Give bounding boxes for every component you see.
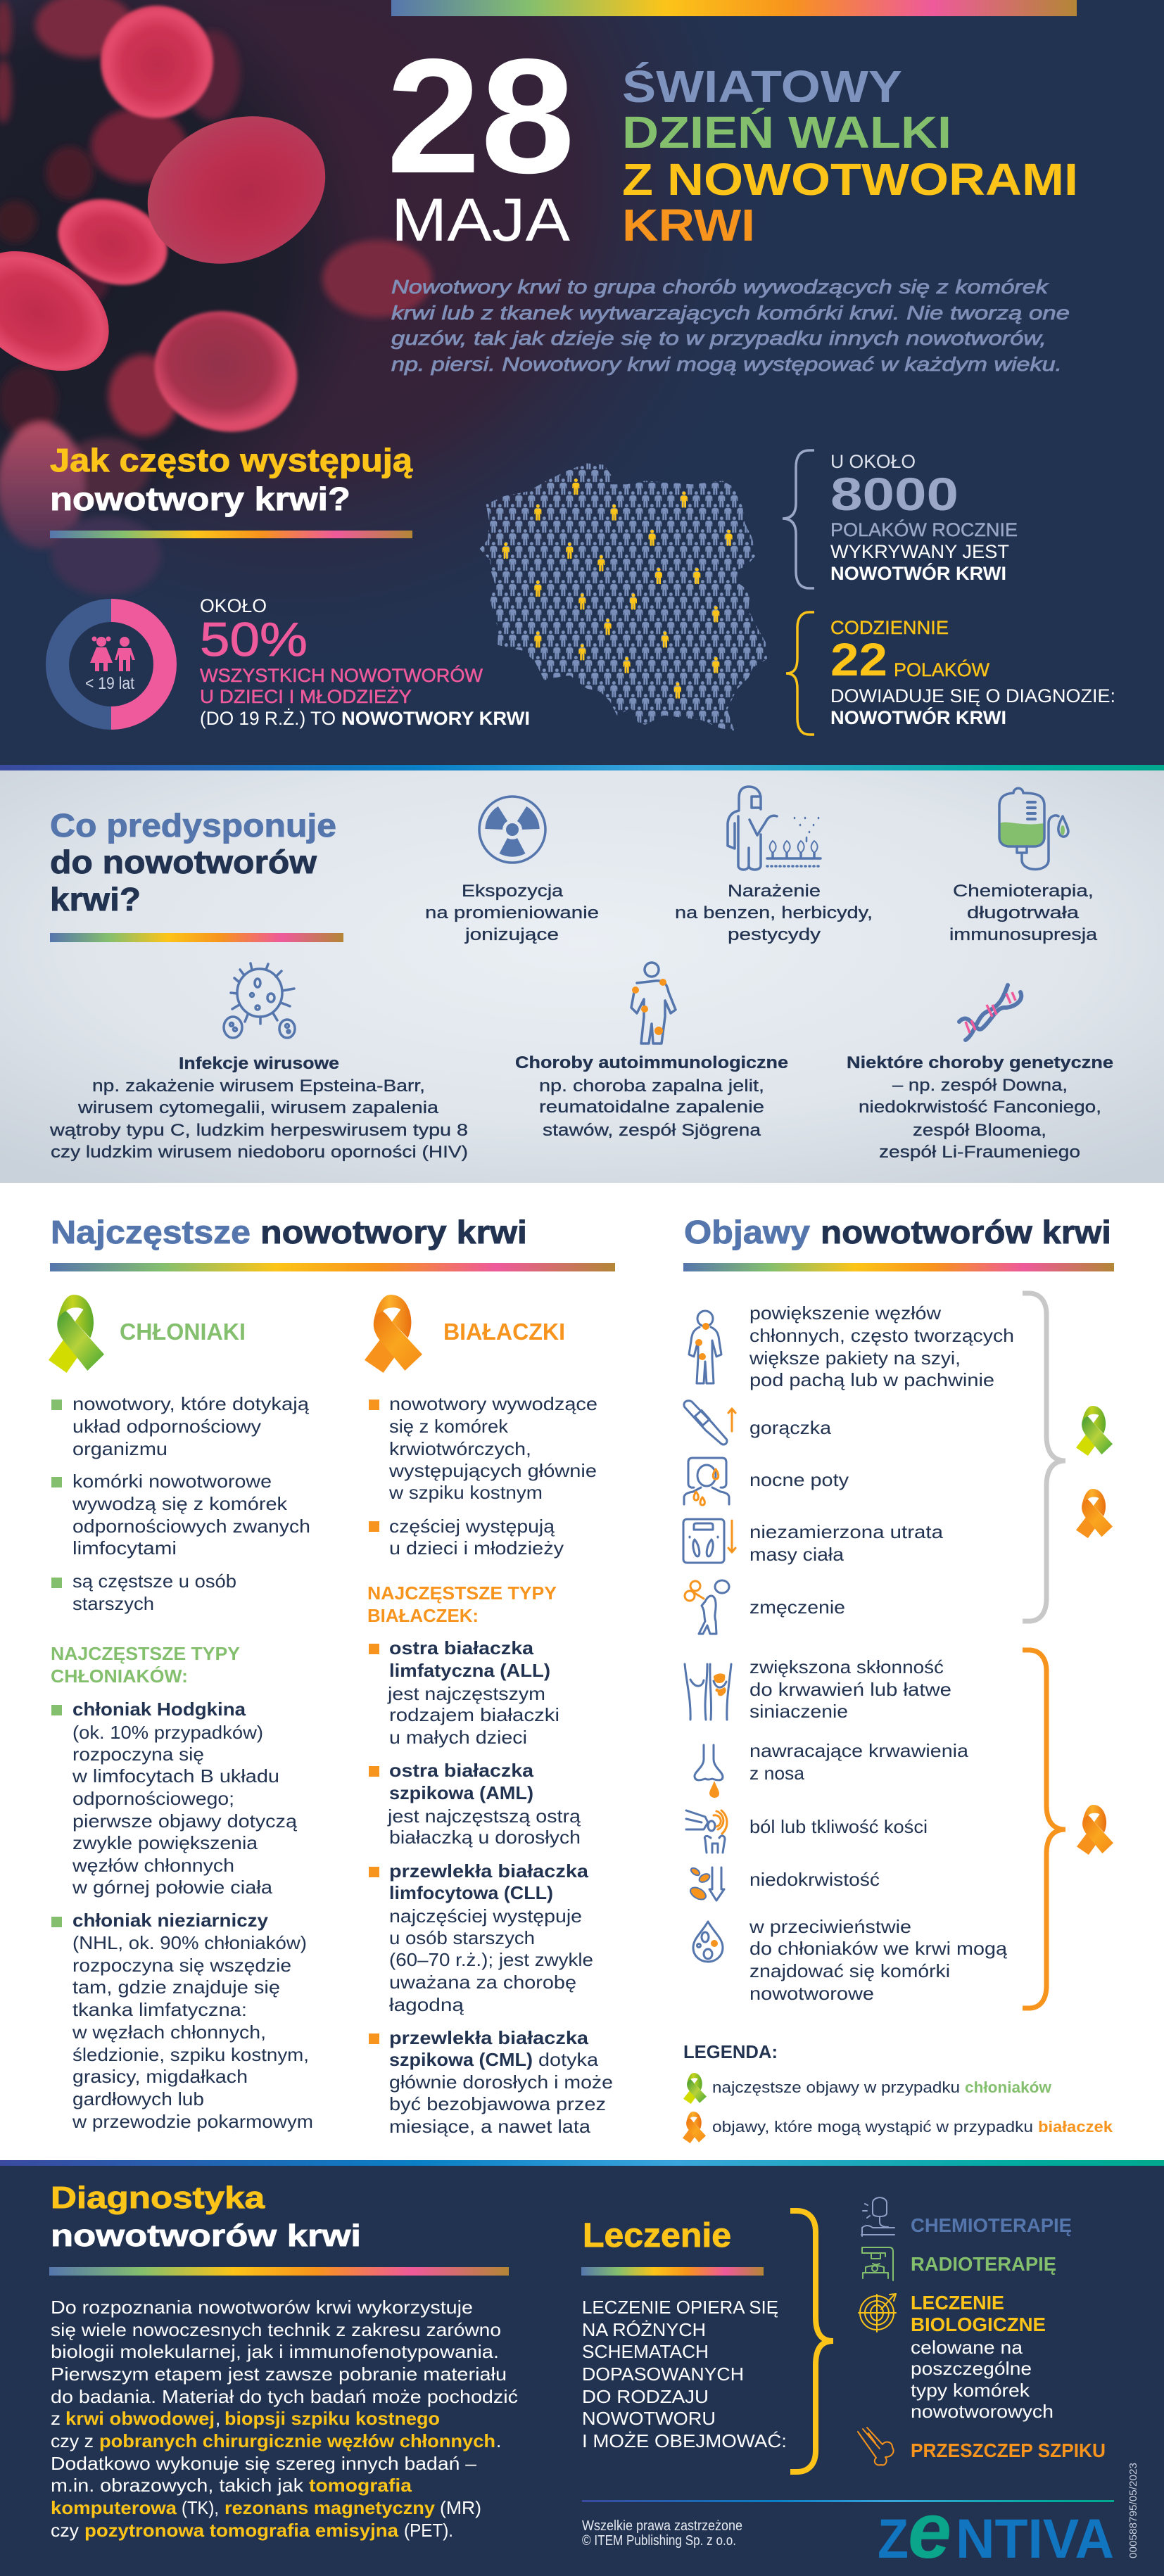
column: białaczki text: najczęściej występuje (389, 1905, 582, 1927)
symptom list text: znajdować się komórki (749, 1960, 950, 1981)
caption: choroby genetyczne: – np. zespół Downa, (892, 1076, 1068, 1095)
treatment options: celowane na (911, 2337, 1023, 2358)
diagnosis paragraph: rezonans magnetyczny (224, 2497, 436, 2518)
icon: scale (683, 1519, 735, 1563)
column: chłoniaki text: odpornościowych zwanych (72, 1516, 310, 1537)
caption: ekspozycja (425, 882, 599, 944)
column: białaczki text: przewlekła białaczka (389, 2027, 589, 2048)
symptom list text: siniaczenie (749, 1701, 848, 1722)
column: białaczki text: być bezobjawowa przez (389, 2093, 606, 2114)
diagnosis paragraph: czy (51, 2520, 79, 2541)
diagnosis paragraph: , (215, 2408, 220, 2429)
legend: LEGENDA: (683, 2041, 778, 2062)
column: białaczki text: nowotwory wywodzące (389, 1393, 597, 1414)
panel: predispositions (0, 765, 1164, 1183)
symptom list text: pod pachą lub w pachwinie (749, 1369, 994, 1390)
stat: 8000: U OKOŁO (830, 451, 916, 472)
brace: yellow (790, 2211, 833, 2472)
title: DZIEŃ WALKI (622, 107, 951, 158)
diagnosis paragraph: tomografia (309, 2475, 412, 2496)
copyright: Wszelkie prawa zastrzeżone (582, 2518, 742, 2534)
treatment intro: NOWOTWORU (582, 2408, 716, 2429)
treatment intro: SCHEMATACH (582, 2341, 709, 2362)
column: białaczki text: występujących głównie (388, 1460, 597, 1481)
diagnosis paragraph: pozytronowa tomografia emisyjna (84, 2520, 399, 2541)
legend: objawy, które mogą wystąpić w przypadku (712, 2118, 1033, 2136)
diagnosis paragraph: czy z (51, 2430, 94, 2451)
symptom list text: nawracające krwawienia (749, 1740, 969, 1761)
symptom list text: w przeciwieństwie (749, 1916, 911, 1937)
column: białaczki text: uważana za chorobę (389, 1972, 576, 1993)
stat: 8000: WYKRYWANY JEST (830, 541, 1009, 562)
heading: leczenie: Leczenie (583, 2217, 731, 2254)
icon: knee pain (686, 1810, 727, 1853)
intro paragraph: krwi lub z tkanek wytwarzających komórki krwi. Nie tworzą one (391, 302, 1070, 324)
column: białaczki text: u osób starszych (389, 1927, 535, 1948)
icon: legs with bruise (685, 1664, 731, 1720)
icon: radiation (479, 797, 545, 863)
column: białaczki text: BIAŁACZEK: (367, 1605, 479, 1626)
treatment options: poszczególne (911, 2358, 1032, 2379)
symptom list text: zwiększona skłonność (749, 1656, 944, 1677)
caption: choroby genetyczne: Niektóre choroby genetyczne (847, 1053, 1113, 1072)
column: chłoniaki text: grasicy, migdałkach (72, 2066, 248, 2087)
treatment intro: NA RÓŻNYCH (582, 2319, 706, 2340)
stat: 50%: 50% (200, 613, 308, 666)
icon: target (859, 2294, 896, 2332)
column: białaczki text: ostra białaczka (389, 1760, 534, 1781)
symptom list text (749, 1302, 1014, 2004)
donut chart 50% (46, 599, 177, 730)
column: białaczki text: limfatyczna (ALL) (389, 1660, 550, 1681)
heading: leczenie (581, 2217, 764, 2276)
heading: objawy nowotworów krwi (683, 1214, 1114, 1271)
column: chłoniaki text: (ok. 10% przypadków) (72, 1722, 263, 1743)
column: chłoniaki text: CHŁONIAKÓW: (51, 1665, 188, 1687)
column: białaczki text: u małych dzieci (389, 1727, 527, 1748)
caption: choroby autoimmunologiczne: np. choroba zapalna jelit, (539, 1077, 764, 1096)
legend: najczęstsze objawy w przypadku (712, 2079, 960, 2096)
icon: radiotherapy (862, 2247, 893, 2280)
symptom list text: masy ciała (749, 1544, 844, 1565)
column: chłoniaki text: rozpoczyna się (72, 1744, 204, 1765)
column: chłoniaki text: zwykle powiększenia (72, 1832, 258, 1853)
caption: choroby genetyczne: zespół Blooma, (913, 1121, 1046, 1140)
icon: virus (224, 963, 295, 1038)
column: białaczki text: ostra białaczka (389, 1637, 534, 1658)
caption: narażenie (675, 882, 873, 944)
caption: choroby genetyczne (847, 1053, 1113, 1162)
column: chłoniaki text: w górnej połowie ciała (72, 1877, 273, 1898)
treatment options: CHEMIOTERAPIĘ (911, 2214, 1072, 2236)
diagnosis paragraph: Do rozpoznania nowotworów krwi wykorzystuje (51, 2297, 473, 2318)
brace: 8000 (783, 450, 814, 588)
column: chłoniaki text: (NHL, ok. 90% chłoniaków) (72, 1932, 307, 1953)
treatment intro: LECZENIE OPIERA SIĘ (582, 2297, 778, 2318)
panel: hero header (0, 0, 1164, 767)
caption: chemioterapia: Chemioterapia, (953, 882, 1094, 901)
symptom list text: do chłoniaków we krwi mogą (749, 1938, 1008, 1959)
diagnosis paragraph: komputerowa (51, 2497, 177, 2518)
treatment options: typy komórek (911, 2380, 1030, 2401)
bullets (51, 1400, 62, 1927)
column: chłoniaki text: wywodzą się z komórek (72, 1493, 288, 1514)
column: białaczki text: limfocytowa (CLL) (389, 1882, 553, 1903)
column: białaczki text: łagodną (389, 1994, 464, 2015)
diagnosis paragraph: . (496, 2430, 501, 2451)
symptom list text: zmęczenie (749, 1597, 845, 1618)
heading: co predysponuje: Co predysponuje (50, 807, 336, 844)
legend: chłoniaków (965, 2079, 1052, 2096)
symptom list text: z nosa (749, 1763, 805, 1784)
column: chłoniaki text: komórki nowotworowe (72, 1471, 272, 1492)
title: Z NOWOTWORAMI (622, 154, 1078, 205)
column: białaczki text: szpikowa (CML) (389, 2049, 533, 2070)
icon: body lymph nodes (689, 1311, 721, 1383)
logo: Zentiva (878, 2487, 1114, 2575)
column: białaczki text: dotyka (538, 2049, 599, 2070)
copyright: © ITEM Publishing Sp. z o.o. (582, 2533, 736, 2549)
icon: night sweats (684, 1458, 729, 1505)
diagnosis paragraph: (PET). (404, 2520, 453, 2541)
caption: chemioterapia: długotrwała (967, 903, 1080, 922)
column: chłoniaki text: węzłów chłonnych (72, 1855, 234, 1876)
caption: choroby autoimmunologiczne: stawów, zespół Sjögrena (543, 1121, 761, 1140)
stat: 8000: NOWOTWÓR KRWI (830, 562, 1006, 584)
treatment options: nowotworowych (911, 2401, 1054, 2422)
ribbon: białaczki (365, 1295, 422, 1373)
column: białaczki text: miesiące, a nawet lata (389, 2116, 591, 2137)
symptom list text: do krwawień lub łatwe (749, 1679, 951, 1700)
icon: tired person (685, 1580, 729, 1634)
column: białaczki text: białaczką u dorosłych (389, 1827, 581, 1848)
legend: białaczek (1038, 2118, 1113, 2136)
icon: anaemia (688, 1867, 724, 1902)
heading: co predysponuje: do nowotworów (50, 844, 317, 880)
treatment options: LECZENIE (911, 2292, 1004, 2314)
icon: joints (631, 963, 676, 1043)
column: chłoniaki text: są częstsze u osób (72, 1571, 236, 1592)
caption: chemioterapia: immunosupresja (949, 925, 1098, 944)
symptom list text: powiększenie węzłów (749, 1302, 941, 1324)
title date: 28 maja: MAJA (391, 186, 571, 254)
symptom list text: nocne poty (749, 1469, 849, 1490)
column: chłoniaki text: chłoniak Hodgkina (72, 1699, 246, 1720)
heading: co predysponuje: krwi? (50, 881, 141, 918)
caption: infekcje: Infekcje wirusowe (179, 1054, 339, 1073)
column: chłoniaki text: w przewodzie pokarmowym (72, 2111, 313, 2132)
column: chłoniaki text: tam, gdzie znajduje się (72, 1977, 280, 1998)
column: chłoniaki text: tkanka limfatyczna: (72, 1999, 247, 2020)
caption: choroby genetyczne: niedokrwistość Fanconiego, (859, 1098, 1101, 1117)
heading: co predysponuje (50, 807, 343, 942)
stat: 50%: OKOŁO (200, 595, 267, 616)
symptom list text: gorączka (749, 1417, 832, 1438)
diagnosis paragraph: (TK), (182, 2497, 219, 2518)
icon: worker spraying (728, 787, 821, 870)
diagnosis paragraph: się wiele nowoczesnych technik z zakresu zarówno (51, 2319, 501, 2340)
icon: children (90, 636, 135, 671)
stat: 8000: POLAKÓW ROCZNIE (830, 519, 1018, 540)
column: białaczki text: się z komórek (389, 1416, 509, 1437)
column: białaczki text: w szpiku kostnym (388, 1482, 543, 1503)
heading: najczęstsze nowotwory krwi: Najczęstsze (51, 1214, 251, 1250)
column: chłoniaki text: w limfocytach B układu (72, 1765, 279, 1787)
icon: thermometer (684, 1401, 735, 1445)
brace: 22 (786, 612, 814, 735)
stat: 22: POLAKÓW (894, 659, 990, 680)
stat: 50% (200, 595, 530, 729)
column: białaczki text: krwiotwórczych, (389, 1438, 531, 1459)
title: KRWI (622, 200, 755, 250)
icon: bone marrow (858, 2428, 894, 2465)
heading: diagnostyka (49, 2181, 509, 2276)
icon: nose bleed (695, 1745, 723, 1798)
caption: choroby autoimmunologiczne (515, 1053, 788, 1140)
column: chłoniaki text: w węzłach chłonnych, (72, 2022, 266, 2043)
bullets (369, 1400, 379, 2044)
heading: jak często: Jak często występują (50, 442, 412, 478)
caption: infekcje: wirusem cytomegalii, wirusem zapalenia (77, 1098, 439, 1117)
treatment intro: I MOŻE OBEJMOWAĆ: (582, 2430, 787, 2451)
column: białaczki text: (60–70 r.ż.); jest zwykle (389, 1949, 593, 1970)
logo: Zentiva: e (908, 2487, 951, 2575)
stat: 8000 (830, 451, 1018, 584)
column: chłoniaki text: rozpoczyna się wszędzie (72, 1955, 291, 1976)
column: chłoniaki text (51, 1393, 313, 2132)
caption: ekspozycja: Ekspozycja (462, 882, 564, 901)
treatment intro (582, 2297, 787, 2451)
logo: Zentiva: Z (878, 2507, 909, 2570)
ribbon: chłoniaki (49, 1295, 104, 1373)
caption: chemioterapia (949, 882, 1098, 944)
intro paragraph (391, 276, 1070, 375)
icon: chemotherapy (861, 2197, 894, 2236)
icon: IV drip (999, 788, 1068, 870)
diagnosis paragraph: biopsji szpiku kostnego (224, 2408, 440, 2429)
icon: DNA (959, 985, 1021, 1040)
ribbon: białaczki symptoms (1076, 1489, 1113, 1538)
document code: 000588795/05/2023 (1127, 2463, 1139, 2558)
stat: 8000: 8000 (830, 468, 959, 520)
intro paragraph: Nowotwory krwi to grupa chorób wywodzących się z komórek (391, 276, 1049, 298)
title (622, 61, 1078, 250)
title date: 28 maja: 28 (386, 25, 575, 208)
column: białaczki text (367, 1393, 613, 2137)
stat: 50%: U DZIECI I MŁODZIEŻY (200, 685, 412, 707)
ribbon: białaczki only (1077, 1805, 1113, 1855)
rainbow top bar (391, 0, 1077, 16)
stat: 50%: WSZYSTKICH NOWOTWORÓW (200, 664, 483, 686)
column: chłoniaki text: gardłowych lub (72, 2088, 204, 2109)
symptom list text: niezamierzona utrata (749, 1521, 944, 1542)
diagnosis paragraph: krwi obwodowej (65, 2408, 215, 2429)
intro paragraph: guzów, tak jak dzieje się to w przypadku innych nowotworów, (391, 327, 1046, 349)
caption: choroby autoimmunologiczne: reumatoidalne zapalenie (539, 1098, 764, 1117)
diagnosis paragraph: Dodatkowo wykonuje się szereg innych badań – (51, 2453, 477, 2474)
column: chłoniaki text: śledzionie, szpiku kostnym, (72, 2044, 309, 2065)
stat: 50%: NOWOTWORY KRWI (341, 708, 530, 729)
diagnosis paragraph: m.in. obrazowych, takich jak (51, 2475, 304, 2496)
donut chart 50%: < 19 lat (85, 674, 134, 693)
diagnosis paragraph: z (51, 2408, 61, 2429)
caption: narażenie: na benzen, herbicydy, (675, 903, 873, 922)
column: białaczki text: jest najczęstszym (387, 1683, 545, 1704)
stat: 22 (830, 617, 1115, 728)
caption: choroby genetyczne: zespół Li-Fraumeniego (879, 1143, 1080, 1162)
heading: diagnostyka: Diagnostyka (51, 2181, 265, 2215)
treatment intro: DOPASOWANYCH (582, 2364, 744, 2385)
column: chłoniaki text: NAJCZĘSTSZE TYPY (51, 1643, 240, 1664)
treatment options (911, 2214, 1106, 2461)
column: chłoniaki text: pierwsze objawy dotyczą (72, 1810, 298, 1832)
diagnosis paragraph: (MR) (440, 2497, 481, 2518)
heading: jak często: nowotwory krwi? (50, 481, 350, 517)
brace: grey (1023, 1293, 1065, 1621)
column: białaczki text: rodzajem białaczki (389, 1704, 559, 1725)
column: białaczki text: NAJCZĘSTSZE TYPY (367, 1582, 557, 1604)
diagnosis paragraph: Pierwszym etapem jest zawsze pobranie materiału (51, 2364, 507, 2385)
stat: 22: NOWOTWÓR KRWI (830, 706, 1006, 728)
column: białaczki text: szpikowa (AML) (389, 1782, 533, 1803)
treatment options: PRZESZCZEP SZPIKU (911, 2439, 1106, 2461)
caption: narażenie: Narażenie (728, 882, 821, 901)
symptom list text: chłonnych, często tworzących (749, 1325, 1014, 1346)
column: chłoniaki text: starszych (72, 1593, 154, 1614)
symptom list text: większe pakiety na szyi, (749, 1347, 961, 1369)
brace: orange (1023, 1650, 1065, 2008)
diagnosis paragraph: biologii molekularnej, jak i immunofenotypowania. (51, 2341, 499, 2362)
column: białaczki text: przewlekła białaczka (389, 1860, 589, 1882)
label: chłoniaki: CHŁONIAKI (120, 1319, 246, 1345)
column: chłoniaki text: odpornościowego; (72, 1788, 234, 1809)
heading: diagnostyka: nowotworów krwi (51, 2219, 361, 2253)
legend (683, 2041, 1113, 2143)
caption: ekspozycja: na promieniowanie (425, 903, 599, 922)
column: chłoniaki text: układ odpornościowy (72, 1416, 261, 1437)
diagnosis paragraph: pobranych chirurgicznie węzłów chłonnych (99, 2430, 495, 2451)
caption: infekcje: np. zakażenie wirusem Epsteina-Barr, (92, 1077, 425, 1096)
treatment intro: DO RODZAJU (582, 2386, 709, 2407)
caption: ekspozycja: jonizujące (464, 925, 559, 944)
symptom list text: ból lub tkliwość kości (749, 1816, 928, 1837)
column: chłoniaki text: limfocytami (72, 1537, 177, 1559)
symptom list text: nowotworowe (749, 1983, 874, 2004)
treatment options: BIOLOGICZNE (911, 2314, 1046, 2335)
ribbon: chłoniaki symptoms (1076, 1406, 1113, 1456)
heading: objawy nowotworów krwi: Objawy (684, 1214, 810, 1250)
column: białaczki text: głównie dorosłych i może (389, 2071, 613, 2093)
logo: Zentiva: NTIVA (956, 2507, 1114, 2570)
column: chłoniaki text: organizmu (72, 1438, 167, 1459)
panel: diagnosis and treatment (0, 2160, 1164, 2576)
icon: blood drop cells (693, 1922, 723, 1962)
column: białaczki text: jest najczęstszą ostrą (387, 1806, 581, 1827)
label: białaczki: BIAŁACZKI (443, 1319, 565, 1345)
illustration: red blood cells (0, 0, 432, 595)
caption: infekcje: wątroby typu C, ludzkim herpeswirusem typu 8 (49, 1121, 468, 1140)
caption: narażenie: pestycydy (728, 925, 821, 944)
symptom list text: niedokrwistość (749, 1869, 880, 1890)
map of Poland made of people (480, 463, 767, 730)
caption: infekcje: czy ludzkim wirusem niedoboru oporności (HIV) (51, 1143, 468, 1162)
stat: 22: DOWIADUJE SIĘ O DIAGNOZIE: (830, 685, 1115, 706)
heading: najczęstsze nowotwory krwi: nowotwory krwi (260, 1214, 527, 1250)
copyright (582, 2518, 742, 2549)
caption: infekcje (49, 1054, 468, 1162)
column: chłoniaki text: chłoniak nieziarniczy (72, 1910, 269, 1931)
column: chłoniaki text: nowotwory, które dotykają (72, 1393, 310, 1414)
stat: 22: 22 (830, 633, 887, 685)
stat: 22: CODZIENNIE (830, 617, 949, 638)
diagnosis paragraph: do badania. Materiał do tych badań może pochodzić (51, 2386, 518, 2407)
diagnosis paragraph (51, 2297, 518, 2541)
heading: najczęstsze nowotwory krwi (50, 1214, 615, 1271)
treatment options: RADIOTERAPIĘ (911, 2253, 1056, 2275)
title: ŚWIATOWY (622, 61, 902, 112)
stat: 50%: (DO 19 R.Ż.) TO (200, 707, 336, 729)
column: białaczki text: u dzieci i młodzieży (389, 1537, 564, 1559)
heading: objawy nowotworów krwi: nowotworów krwi (821, 1214, 1111, 1250)
heading: jak często (50, 442, 412, 538)
caption: choroby autoimmunologiczne: Choroby autoimmunologiczne (515, 1053, 788, 1072)
intro paragraph: np. piersi. Nowotwory krwi mogą występować w każdym wieku. (391, 353, 1062, 375)
column: białaczki text: częściej występują (389, 1516, 555, 1537)
